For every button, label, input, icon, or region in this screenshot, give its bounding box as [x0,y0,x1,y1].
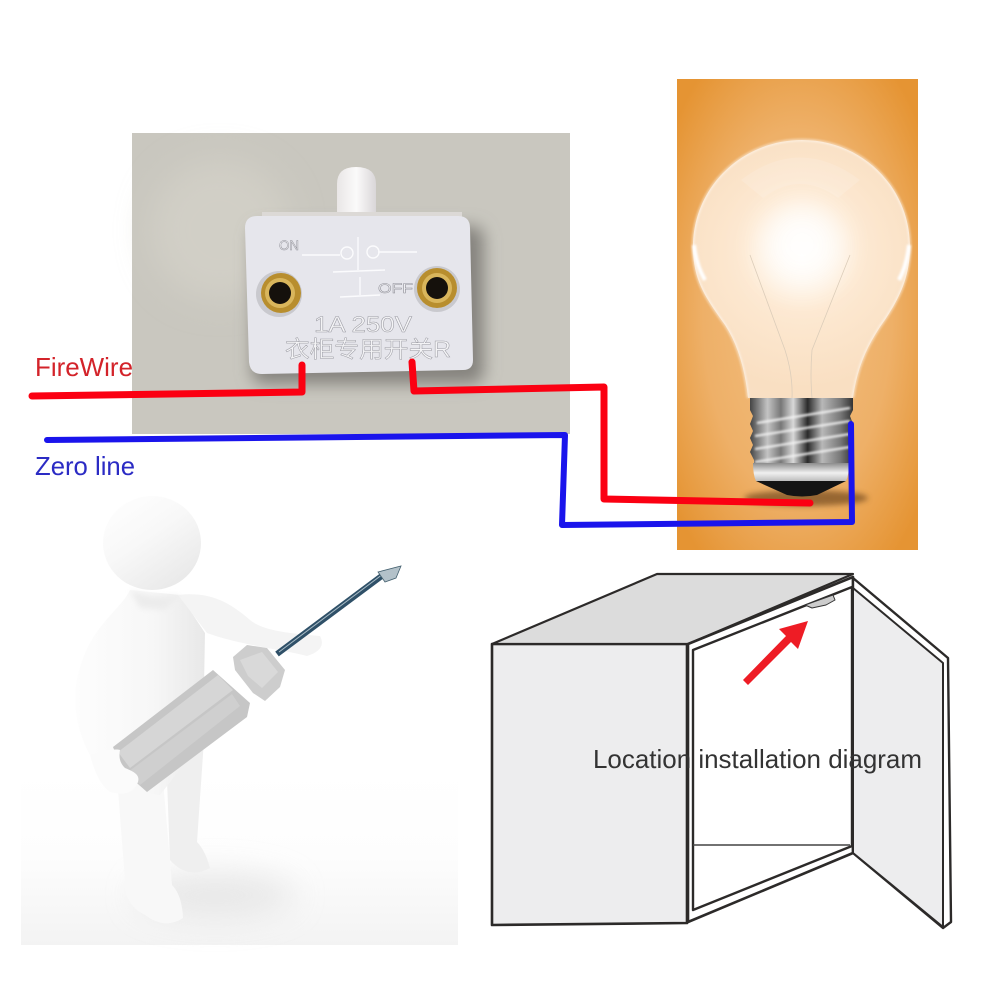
label: Zero line: Zero line [35,451,135,481]
panel: switch photo [132,133,570,434]
label: chinese marking: 衣柜专用开关R [285,336,451,362]
cabinet side [492,644,687,925]
panel: light bulb [677,79,918,550]
wire: live input [32,365,302,396]
icon: screwdriver [113,566,401,792]
label: FireWire: FireWire [35,352,133,382]
icon: door switch [245,167,484,384]
caption: Location installation diagram [593,744,922,774]
wire: neutral [47,424,852,525]
panel: cabinet location diagram [492,574,951,928]
wire: live to bulb [412,362,810,503]
icon: left terminal [256,271,302,317]
door face [853,588,943,927]
cabinet door [853,578,951,928]
label: OFF: OFF [378,280,413,296]
icon: hand [90,749,138,794]
cabinet frame [688,577,853,922]
label: ON: ON [279,237,299,253]
panel: worker with screwdriver [21,496,458,945]
cabinet opening [693,587,852,910]
shelf line [693,844,850,846]
icon: light bulb [693,140,910,496]
figure: person [75,496,322,923]
label: rating: 1A 250V [314,312,412,337]
arrow [743,621,808,685]
cabinet top [492,574,853,644]
icon: right terminal [414,266,460,312]
switch position [805,595,835,608]
